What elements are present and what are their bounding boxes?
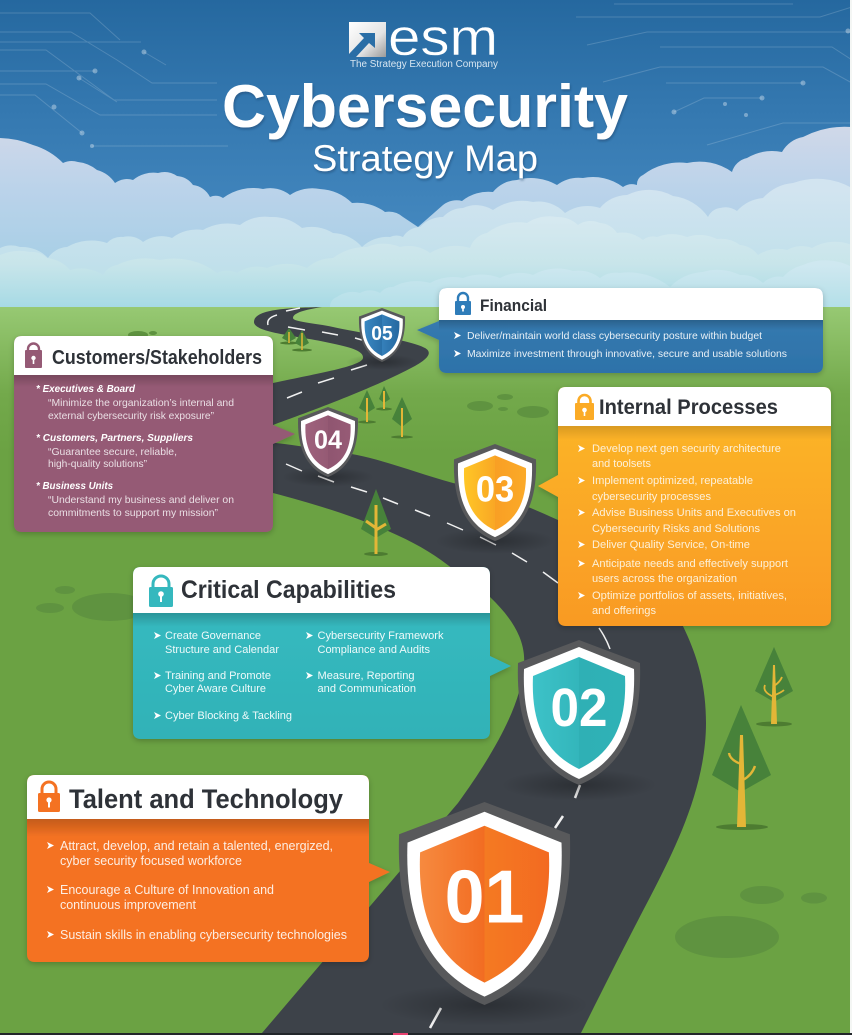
logo mark xyxy=(349,22,386,57)
grass ground xyxy=(0,307,852,1035)
icon: blue lock xyxy=(455,293,471,315)
financial header band xyxy=(439,288,823,320)
icon: plum lock xyxy=(25,344,42,368)
shield 01 xyxy=(379,802,589,1026)
shield 05: 05 xyxy=(371,323,393,345)
grass patches xyxy=(36,331,827,958)
panel: customers and stakeholders xyxy=(14,336,295,532)
shield 05 xyxy=(346,308,418,370)
internal bullets: and offerings xyxy=(592,605,656,617)
panel: critical capabilities xyxy=(133,567,511,739)
talent bullets: Attract, develop, and retain a talented, energized, xyxy=(60,839,333,853)
tree: small right xyxy=(755,647,793,726)
talent callout body xyxy=(27,775,390,962)
critical callout body xyxy=(133,567,511,739)
shield 02 xyxy=(501,640,657,801)
talent bullets: cyber security focused workforce xyxy=(60,854,242,868)
customers text: high-quality solutions” xyxy=(48,459,148,470)
critical bullets: Cybersecurity Framework xyxy=(318,630,444,642)
road centre dashes xyxy=(268,308,610,1028)
critical bullets: Compliance and Audits xyxy=(318,644,430,656)
talent header band xyxy=(27,775,369,819)
critical bullets: Training and Promote xyxy=(165,670,271,682)
winding road xyxy=(150,307,706,1033)
customers heading: Customers/Stakeholders xyxy=(52,347,262,369)
internal bullets: Advise Business Units and Executives on xyxy=(592,507,796,519)
talent bullets: Encourage a Culture of Innovation and xyxy=(60,883,274,897)
customers header band xyxy=(14,336,273,375)
sky background xyxy=(0,0,852,310)
internal bullets: Cybersecurity Risks and Solutions xyxy=(592,523,760,535)
critical bullets: Cyber Blocking & Tackling xyxy=(165,710,292,722)
critical bullets: Measure, Reporting xyxy=(318,670,415,682)
critical bullets: and Communication xyxy=(318,683,416,695)
talent bullets xyxy=(47,839,347,942)
logo xyxy=(349,9,498,67)
panel: talent and technology xyxy=(27,775,390,962)
internal bullets: Anticipate needs and effectively support xyxy=(592,558,788,570)
icon: amber lock xyxy=(575,395,594,420)
financial callout body xyxy=(417,288,823,373)
shield 04: 04 xyxy=(314,425,342,454)
internal bullets: Develop next gen security architecture xyxy=(592,443,781,455)
talent bullets: Sustain skills in enabling cybersecurity technologies xyxy=(60,928,347,942)
critical bullets: Cyber Aware Culture xyxy=(165,683,266,695)
internal bullets xyxy=(578,443,796,617)
customers text: * Customers, Partners, Suppliers xyxy=(36,433,193,444)
internal callout body xyxy=(538,387,831,626)
customers text: commitments to support my mission” xyxy=(48,508,219,519)
internal bullets: Deliver Quality Service, On-time xyxy=(592,539,750,551)
talent bullets: continuous improvement xyxy=(60,898,196,912)
internal header band xyxy=(558,387,831,426)
subtitle: Strategy Map xyxy=(312,138,538,179)
financial bullets xyxy=(454,331,787,360)
title: Cybersecurity xyxy=(222,73,629,140)
shield 02: 02 xyxy=(550,678,608,738)
logo wordmark: esm xyxy=(388,9,498,67)
critical bullets: Create Governance xyxy=(165,630,261,642)
panel: internal processes xyxy=(538,387,831,626)
shield 04 xyxy=(282,407,374,487)
shield 01: 01 xyxy=(445,855,524,939)
icon: orange lock xyxy=(38,782,60,812)
circuit board lines xyxy=(0,4,852,148)
tree group: far xyxy=(280,328,312,352)
financial bullets: Maximize investment through innovative, secure and usable solutions xyxy=(467,349,787,360)
financial heading: Financial xyxy=(480,296,547,315)
tree: large right xyxy=(712,705,771,830)
internal bullets: and toolsets xyxy=(592,458,651,470)
clouds xyxy=(0,127,852,310)
internal bullets: Implement optimized, repeatable xyxy=(592,475,753,487)
tree: road side xyxy=(361,489,391,556)
icon: teal lock xyxy=(149,576,173,607)
talent heading: Talent and Technology xyxy=(69,784,343,814)
internal heading: Internal Processes xyxy=(599,396,778,419)
critical bullets xyxy=(154,630,444,722)
customers callout body xyxy=(14,336,295,532)
tree group: middle xyxy=(358,386,413,438)
customers text xyxy=(36,384,234,519)
customers text: * Executives & Board xyxy=(36,384,136,395)
customers text: external cybersecurity risk exposure” xyxy=(48,411,215,422)
logo tagline: The Strategy Execution Company xyxy=(350,59,498,70)
customers text: “Minimize the organization’s internal and xyxy=(48,398,234,409)
customers text: “Understand my business and deliver on xyxy=(48,495,234,506)
customers text: * Business Units xyxy=(36,481,113,492)
internal bullets: Optimize portfolios of assets, initiatives, xyxy=(592,590,787,602)
customers text: “Guarantee secure, reliable, xyxy=(48,447,177,458)
critical bullets: Structure and Calendar xyxy=(165,644,279,656)
critical heading: Critical Capabilities xyxy=(181,576,396,604)
panel: financial xyxy=(417,288,823,373)
financial bullets: Deliver/maintain world class cybersecurity posture within budget xyxy=(467,331,762,342)
shield 03 xyxy=(435,444,555,554)
internal bullets: users across the organization xyxy=(592,573,737,585)
critical header band xyxy=(133,567,490,613)
shield 03: 03 xyxy=(476,469,514,510)
internal bullets: cybersecurity processes xyxy=(592,491,711,503)
